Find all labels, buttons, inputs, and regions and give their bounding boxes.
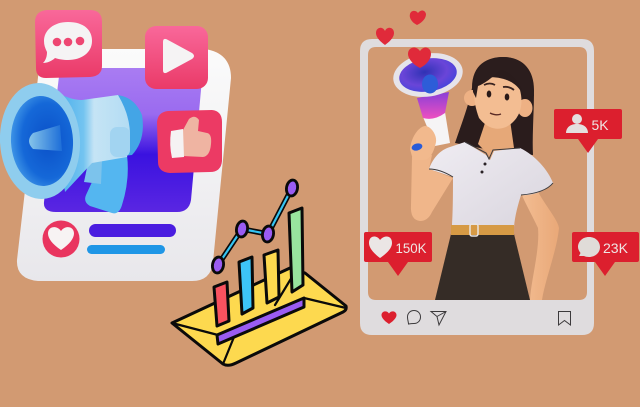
purple image panel [44, 68, 203, 212]
chart: envelope with rising bars [172, 179, 346, 365]
icon: heart badge [42, 220, 80, 258]
facial features [484, 84, 514, 115]
line graph [211, 179, 299, 274]
panel: social media post card [17, 49, 231, 281]
callout: 150K likes [364, 232, 432, 276]
face [464, 77, 532, 129]
purple strip [217, 298, 304, 344]
neck [478, 120, 514, 158]
back hair [455, 57, 534, 155]
icon: chat bubble tile [35, 10, 102, 78]
red bar [214, 282, 229, 326]
callout: 23K comments [572, 232, 639, 276]
front hair [473, 57, 534, 98]
icon: thumbs up tile [157, 110, 222, 173]
illustration: woman with megaphone [390, 48, 559, 300]
panel: photo post frame [360, 39, 594, 335]
icon: play button tile [145, 26, 208, 89]
post text bars [87, 224, 176, 254]
green bar [289, 208, 303, 292]
megaphone prop [390, 48, 466, 146]
callout: 150K likes: 150K [396, 241, 426, 256]
blue bar [239, 257, 253, 314]
callout: 5K followers: 5K [592, 118, 608, 133]
icon: floating hearts [376, 10, 431, 68]
cone [50, 88, 130, 192]
action icons row [382, 310, 570, 325]
shirt [429, 142, 553, 227]
skirt [435, 234, 530, 300]
left arm [411, 155, 453, 221]
rear cap [116, 95, 143, 156]
handle [85, 155, 128, 213]
belt [451, 224, 514, 236]
callout: 23K comments: 23K [603, 241, 628, 256]
icon: megaphone [0, 81, 143, 213]
yellow bar [264, 250, 279, 303]
callout: 5K followers [554, 109, 622, 153]
envelope [172, 268, 346, 365]
hand [410, 126, 436, 160]
horn [0, 81, 83, 201]
right arm [521, 190, 559, 300]
